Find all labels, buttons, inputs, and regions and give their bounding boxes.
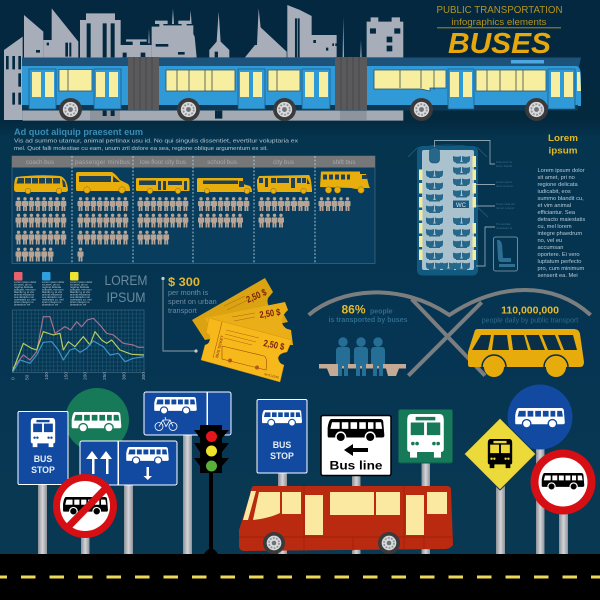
legend captions: phaedrum vel	[14, 302, 31, 306]
sign: bus stop left: STOP	[31, 465, 55, 475]
legend captions: animal efficiantur	[42, 292, 62, 296]
pictogram: school bus passengers	[198, 197, 249, 228]
sign poles	[38, 435, 568, 554]
front ticket: 2,50 $	[262, 338, 286, 353]
skyline ground	[23, 110, 403, 121]
sign: green bus front	[398, 410, 452, 463]
legend captions: blandit cu, et vim	[70, 290, 91, 294]
body text column: cu, mel lorem	[538, 224, 572, 230]
title block: infographics elements	[452, 17, 547, 27]
chart axis labels: 0	[10, 377, 16, 380]
body text column: iudicabit, eos	[538, 189, 571, 195]
bus wheels	[59, 98, 548, 121]
body text column	[538, 168, 585, 279]
sign: bus stop left	[18, 412, 68, 484]
icon: coach bus	[14, 175, 68, 194]
bus body	[22, 66, 581, 106]
stat: 86%: is transported by buses	[329, 317, 408, 324]
stat: 110,000,000: people daily by public transport	[482, 318, 578, 324]
stat: 86%: 86%	[342, 302, 366, 316]
callout labels: lorem blandit	[496, 164, 512, 168]
body text column: et vim animal	[538, 203, 571, 209]
table headers: city bus	[273, 159, 294, 166]
title block	[436, 5, 562, 60]
sign: bus stop right: BUS	[273, 440, 291, 450]
heading: lorem ipsum: ipsum	[548, 146, 578, 156]
heading: lorem ipsum: Lorem	[548, 133, 578, 143]
legend captions: maiestatis cu, mel	[14, 298, 36, 302]
front ticket	[201, 318, 292, 382]
chart data lines	[13, 317, 144, 372]
sign: bus line: Bus line	[330, 460, 382, 472]
legend captions: Lorem ipsum dolor	[70, 280, 92, 284]
legend captions: maiestatis cu, mel	[70, 298, 92, 302]
bus accordion joints	[128, 57, 367, 110]
chart axis labels: 50	[24, 374, 30, 380]
tickets	[192, 278, 293, 382]
chart axis labels: 200	[82, 372, 88, 380]
callout labels: Odio pars no	[496, 160, 512, 164]
front ticket: BUS TICKET	[215, 335, 225, 358]
body text column: accumsan	[538, 245, 563, 251]
line chart	[10, 310, 147, 380]
body text column: pro, cum minimum	[538, 266, 585, 272]
icon: city bus	[257, 175, 312, 194]
body text column: Lorem ipsum dolor	[538, 168, 585, 174]
legend captions: sit amet, pri no	[14, 282, 32, 286]
legend captions: iudicabit, eos sum	[42, 288, 64, 292]
callout labels: nisl ac, tempor	[496, 206, 514, 210]
legend captions: sea detracto mei	[14, 295, 34, 299]
callout labels: Fusce vitae elit	[496, 202, 515, 206]
sign: bus lane arrows	[80, 441, 177, 485]
table headers	[26, 159, 356, 166]
title block: BUSES	[448, 28, 552, 60]
pictogram: low-floor bus passengers	[138, 197, 188, 244]
legend captions: lorem integre no	[42, 300, 62, 304]
roof vent	[511, 60, 544, 64]
sign: yellow diamond bus	[464, 418, 536, 490]
chart axis labels: 300	[141, 372, 147, 380]
legend captions: lorem integre no	[70, 300, 90, 304]
city skyline	[4, 5, 403, 121]
body text column: senserit ea. Mei	[538, 273, 578, 279]
bus outline	[408, 145, 488, 217]
heading: chart	[104, 272, 148, 305]
bench with people	[319, 337, 406, 376]
back ticket: 2,50 $	[245, 287, 269, 306]
traffic light	[194, 425, 229, 554]
body text column: regione delicata	[538, 182, 578, 188]
legend captions: iudicabit, eos sum	[70, 288, 92, 292]
icon: passenger minibus	[76, 172, 130, 193]
chart axis labels: 100	[44, 372, 50, 380]
icon: seat	[494, 237, 518, 271]
legend captions: regione delicata	[14, 285, 33, 289]
callout labels: Pro ancillae	[496, 222, 511, 226]
legend captions: maiestatis cu, mel	[42, 298, 64, 302]
table: bus types and capacity	[12, 156, 375, 264]
table headers: low-floor city bus	[140, 159, 186, 166]
legend captions: blandit cu, et vim	[14, 290, 35, 294]
arches	[309, 290, 591, 376]
legend captions: animal efficiantur	[70, 292, 90, 296]
red bus windows	[243, 491, 447, 535]
middle ticket: 2,50 $	[259, 307, 282, 321]
chart axis labels: 150	[64, 372, 70, 380]
chart axis labels	[10, 372, 147, 380]
table headers: school bus	[207, 159, 237, 166]
icon: school bus	[197, 178, 252, 194]
intro text: mel. Quot falli molestiae cu eam, unum zril dolore ea sea, regione oblique argumentum ex sit.	[14, 146, 268, 152]
window strips	[419, 156, 476, 260]
table headers: coach bus	[26, 159, 54, 166]
stat: 86%: people	[370, 308, 393, 316]
sign: bus stop right	[257, 400, 307, 473]
callout labels	[496, 160, 515, 230]
body text column: no, vel eu	[538, 238, 562, 244]
body text column: efficiantur. Sea	[538, 210, 576, 216]
bus seating plan	[408, 140, 518, 276]
callout: spending: per month is	[168, 288, 209, 297]
chart axis labels: 300	[122, 372, 128, 380]
windows and doors	[29, 69, 581, 109]
intro text: Vis ad summo utamur, animal pertinax usu id. No qui singulis dissentiet, evertitur voluptaria ex	[14, 138, 298, 144]
title block: PUBLIC TRANSPORTATION	[436, 5, 562, 16]
legend captions: animal efficiantur	[14, 292, 34, 296]
intro text	[14, 138, 298, 152]
WC box: WC	[456, 203, 467, 209]
body text column: summo blandit cu,	[538, 196, 584, 202]
icon: big yellow bus	[468, 329, 584, 377]
callout: spending: $ 300	[168, 277, 200, 289]
body text column: luptatum perfecto	[538, 259, 581, 265]
table headers: passenger minibus	[75, 159, 130, 166]
articulated blue bus	[22, 57, 581, 121]
legend captions: iudicabit, eos sum	[14, 288, 36, 292]
body text column: detracto maiestatis	[538, 217, 585, 223]
heading: chart: LOREM	[104, 272, 148, 288]
legend captions: Lorem ipsum dolor	[42, 280, 64, 284]
stat: 110,000,000	[482, 304, 578, 324]
heading: lorem ipsum	[548, 133, 578, 156]
chart legend	[14, 272, 92, 306]
front ticket: № 012345	[264, 372, 279, 380]
legend captions: phaedrum vel	[70, 302, 87, 306]
callout lines	[434, 140, 495, 266]
pictogram: shift bus passengers	[318, 197, 350, 211]
legend captions: sea detracto mei	[70, 295, 90, 299]
legend captions: blandit cu, et vim	[42, 290, 63, 294]
sign: red ring bus	[530, 450, 596, 514]
pictogram: city bus passengers	[258, 197, 310, 228]
red bus	[239, 486, 453, 554]
legend captions: regione delicata	[42, 285, 61, 289]
red bus wheels	[263, 532, 285, 554]
pictogram: coach bus passengers	[16, 197, 66, 262]
legend captions: regione delicata	[70, 285, 89, 289]
callout labels: dolor sit amet	[496, 184, 513, 188]
legend captions: lorem integre no	[14, 300, 34, 304]
legend captions: phaedrum vel	[42, 302, 59, 306]
callout labels: consetetur at	[496, 226, 512, 230]
legend captions: sit amet, pri no	[70, 282, 88, 286]
body text column: integre phaedrum	[538, 231, 582, 237]
icon: low-floor city bus	[136, 178, 190, 194]
body text column: oportere. Ei vero	[538, 252, 580, 258]
passenger seats	[426, 156, 470, 270]
heading: chart: IPSUM	[106, 289, 146, 305]
heading: bus types: Ad quot aliquip praesent eum	[14, 127, 143, 137]
sign: green circle bus	[65, 388, 129, 452]
icon: shift bus	[320, 172, 370, 193]
sign: bus stop left: BUS	[34, 454, 52, 464]
body text column: sit amet, pri no	[538, 175, 575, 181]
driver seat	[430, 148, 440, 163]
callout: spending: transport	[168, 306, 197, 315]
stat: 86%	[329, 302, 408, 324]
legend captions	[14, 280, 92, 306]
table headers: shift bus	[332, 159, 356, 166]
legend captions: sea detracto mei	[42, 295, 62, 299]
sign: bus stop right: STOP	[270, 451, 294, 461]
legend captions: Lorem ipsum dolor	[14, 280, 36, 284]
sign: no buses	[53, 474, 117, 538]
legend captions: sit amet, pri no	[42, 282, 60, 286]
sign: blue circle bus	[508, 384, 572, 450]
bus roof	[22, 58, 581, 67]
pictogram: minibus passengers	[78, 197, 128, 262]
callout: spending: spent on urban	[168, 297, 217, 306]
callout: spending	[161, 277, 217, 353]
chart axis labels: 250	[102, 372, 108, 380]
road	[0, 554, 600, 600]
sign: bus line	[321, 416, 391, 476]
sign: bus and bicycle lane	[144, 392, 231, 435]
stat: 110,000,000: 110,000,000	[501, 304, 559, 316]
callout labels: Lorem ipsum	[496, 180, 513, 184]
